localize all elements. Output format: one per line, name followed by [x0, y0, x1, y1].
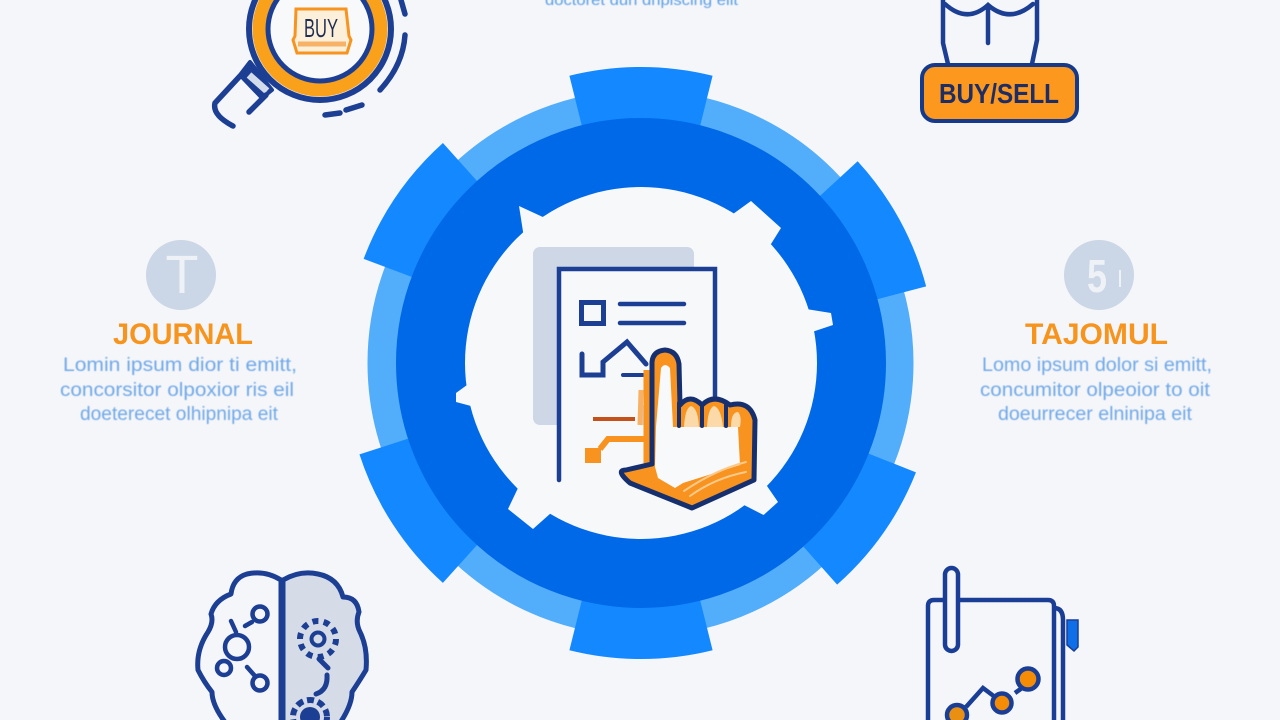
magnifier handle [215, 62, 272, 126]
body text: concumitor olpeoior to oit [980, 380, 1211, 401]
lens rings [249, 0, 391, 100]
heading: TAJOMUL [1025, 318, 1168, 351]
icon: notebook with chart [928, 568, 1078, 720]
network nodes [217, 606, 268, 690]
body text: Lomo ipsum dolor si emitt, [982, 355, 1212, 376]
icon: number badge: T [166, 245, 198, 305]
centre divider [279, 582, 285, 720]
dark blue inner ring [431, 153, 851, 573]
body text: concorsitor olpoxior ris eil [60, 380, 294, 401]
icon: buy/sell button [922, 0, 1077, 121]
motion arcs [325, 0, 405, 115]
central ring [382, 93, 901, 633]
body text [60, 355, 297, 425]
sleeve outline [943, 0, 1037, 64]
line chart [947, 668, 1038, 720]
icon: number badge [1064, 240, 1134, 310]
right hemisphere [283, 573, 366, 720]
button label [922, 65, 1077, 121]
icon: number badge [146, 240, 216, 310]
document shadow panel [533, 247, 694, 425]
chart emblem inside lens: BUY [304, 13, 338, 43]
icon: magnifying glass [215, 0, 405, 126]
body text: doeurrecer elninipa eit [998, 404, 1193, 425]
six outer ring segments [384, 93, 901, 633]
pointing hand [621, 350, 755, 508]
heading: JOURNAL [113, 318, 253, 351]
document sheet [559, 269, 715, 480]
body text: doeterecet olhipnipa eit [80, 404, 279, 425]
orange signature marks [585, 370, 648, 465]
blue tab [1067, 620, 1078, 651]
icon: brain [198, 573, 366, 720]
body text [980, 355, 1212, 425]
icon: document with pointing hand [533, 247, 755, 508]
body text: Lomin ipsum dior ti emitt, [63, 355, 297, 376]
notebook pages [928, 600, 1063, 720]
gear cluster [293, 621, 336, 720]
left callout: journal [60, 240, 297, 425]
white centre with notches [456, 187, 833, 539]
icon: number badge: 5 [1087, 250, 1107, 302]
left hemisphere [198, 573, 281, 720]
chart emblem inside lens [293, 9, 351, 53]
button label: BUY/SELL [939, 78, 1059, 109]
light blue outer ring [382, 105, 898, 621]
document content lines [582, 302, 684, 375]
clip [945, 568, 958, 651]
right callout: tajomul [980, 240, 1212, 425]
